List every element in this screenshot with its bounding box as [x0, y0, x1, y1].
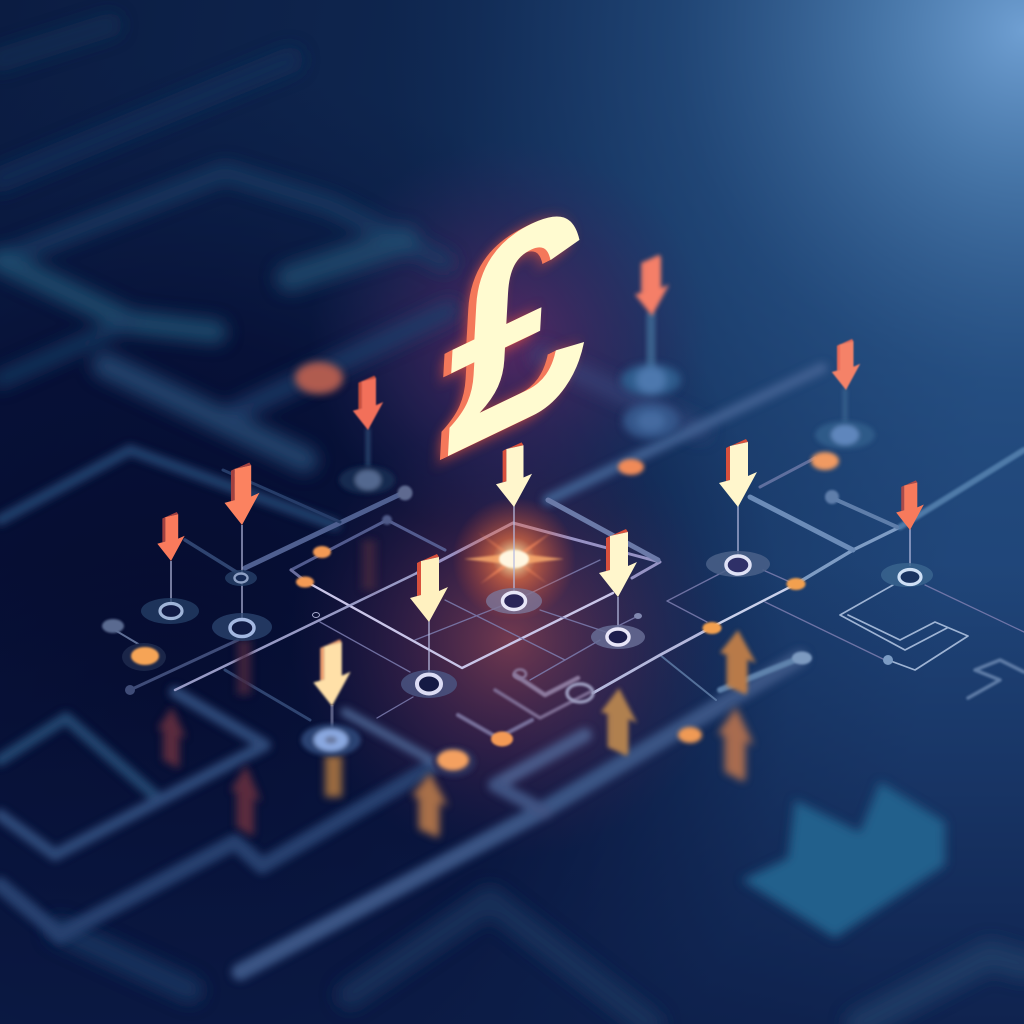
arrow: coral — [353, 376, 383, 430]
node — [225, 570, 257, 586]
pound symbol: £ — [437, 136, 594, 520]
node — [141, 598, 199, 624]
small squiggle traces — [515, 675, 578, 695]
arrow: coral blurred — [635, 255, 669, 316]
node — [881, 563, 933, 587]
node — [706, 551, 770, 577]
arrow: cream — [719, 439, 757, 507]
arrow: coral — [157, 512, 185, 561]
node — [591, 625, 645, 649]
arrow: coral — [896, 480, 924, 530]
right trace — [593, 627, 712, 693]
node blurred — [339, 466, 395, 494]
node — [212, 613, 272, 641]
arrow: cream — [599, 529, 637, 597]
icon: blurred block shape — [742, 782, 945, 938]
node blurred — [301, 724, 361, 756]
orange dots — [122, 362, 839, 777]
glowing hotspot — [452, 497, 576, 621]
arrow: cream — [496, 442, 532, 507]
thin inner lines — [320, 560, 1024, 718]
arrow: coral — [225, 462, 259, 525]
down arrows — [157, 255, 924, 706]
diamond trace — [291, 520, 660, 668]
pound symbol: £ — [433, 139, 590, 523]
network nodes — [102, 364, 933, 756]
node stems — [171, 505, 910, 728]
pound symbol: £ — [433, 138, 590, 522]
pound symbol: £ — [441, 134, 598, 518]
node blurred — [815, 421, 875, 449]
blurred stems — [368, 312, 845, 468]
blurred mid traces — [0, 368, 822, 972]
node — [486, 588, 542, 614]
box outline — [840, 585, 968, 670]
arrow: coral blurred — [832, 339, 860, 390]
arrow: cream blurred — [313, 639, 351, 706]
pound symbol: £ — [435, 137, 592, 521]
small terminals — [102, 486, 893, 702]
arrow: cream — [410, 554, 448, 622]
node — [401, 670, 457, 698]
pound symbol: £ — [439, 135, 596, 519]
left trace — [245, 492, 405, 568]
blurred up arrows — [158, 540, 756, 838]
sharp circuit traces — [108, 450, 1024, 738]
node blurred — [621, 364, 681, 439]
